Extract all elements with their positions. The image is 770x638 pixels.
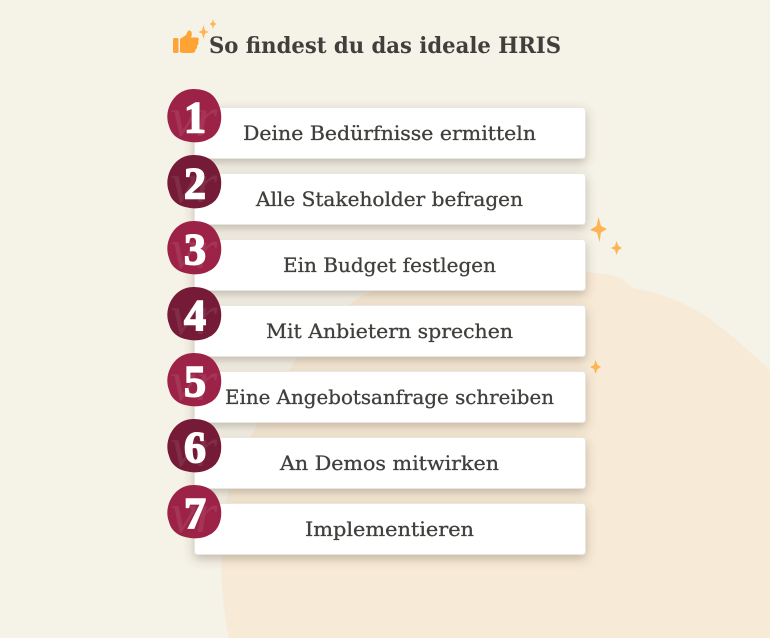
- step 1: Deine Bedürfnisse ermitteln: [243, 121, 536, 145]
- step 6: [167, 417, 586, 488]
- step 3: [167, 219, 586, 290]
- step 7: [167, 483, 586, 554]
- sparkle: large right: [590, 217, 607, 242]
- sparkle: lower right: [590, 360, 601, 374]
- step 6: vr: [171, 417, 218, 479]
- step 6: 6: [184, 423, 206, 472]
- step 3: vr: [171, 219, 218, 281]
- step 4: [167, 285, 586, 356]
- title sparkles: [198, 19, 216, 39]
- step 1: vr: [171, 87, 218, 149]
- step 2: vr: [171, 153, 218, 215]
- step 4: 4: [184, 291, 206, 340]
- step 3: 3: [184, 225, 206, 274]
- step 3: Ein Budget festlegen: [283, 253, 496, 277]
- step 5: [167, 351, 586, 422]
- step 7: 7: [184, 489, 206, 538]
- step 4: vr: [171, 285, 218, 347]
- sparkle: small right: [611, 241, 622, 255]
- step 2: Alle Stakeholder befragen: [255, 187, 523, 211]
- step 6: An Demos mitwirken: [279, 451, 499, 475]
- step 7: Implementieren: [305, 517, 474, 541]
- step 7: vr: [171, 483, 218, 545]
- step 2: 2: [184, 159, 206, 208]
- title icon: thumbs up: [173, 30, 199, 53]
- step 4: Mit Anbietern sprechen: [266, 319, 513, 343]
- step 5: Eine Angebotsanfrage schreiben: [225, 385, 554, 409]
- step 2: [167, 153, 586, 224]
- step 5: 5: [184, 357, 206, 406]
- step 5: vr: [171, 351, 218, 413]
- step 1: [167, 87, 586, 158]
- step 1: 1: [184, 93, 206, 142]
- title: So findest du das ideale HRIS: [209, 33, 561, 59]
- background blob: [221, 271, 770, 638]
